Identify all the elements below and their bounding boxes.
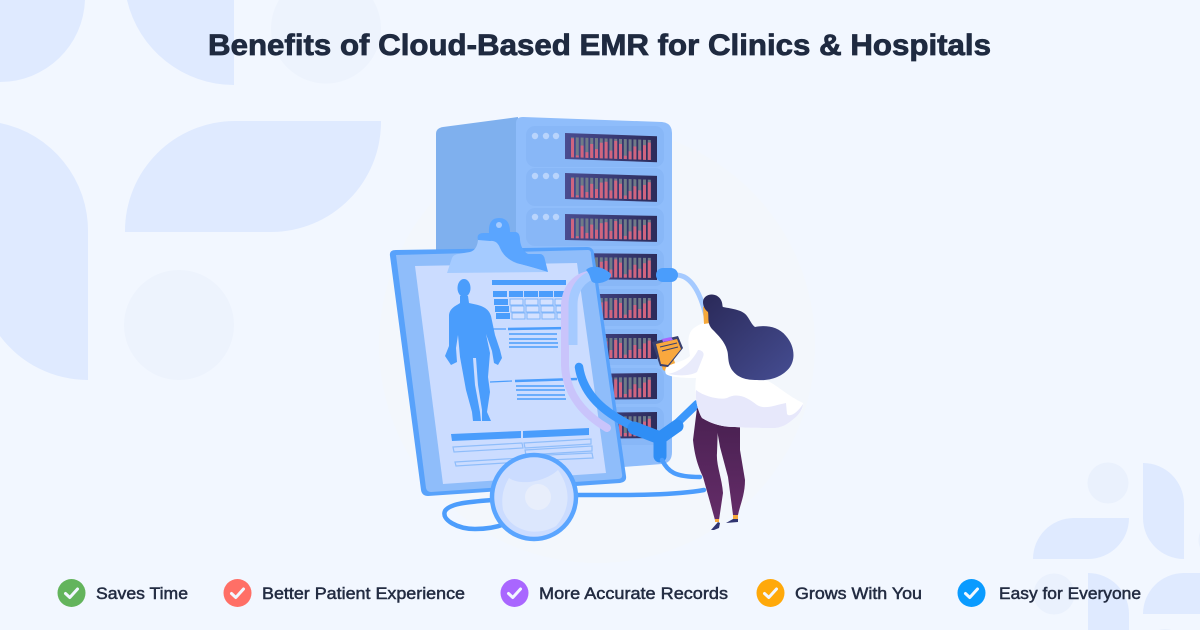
- check icon: [58, 579, 86, 607]
- server tower: [436, 117, 672, 472]
- benefit: better patient experience: [224, 579, 465, 607]
- stethoscope: thick dark tubes and junction: [579, 367, 700, 477]
- stethoscope: left ear tip: [586, 267, 611, 283]
- check icon: [958, 579, 986, 607]
- benefit: more accurate records: [500, 579, 728, 607]
- server bar displays: [565, 133, 657, 439]
- pale backdrop circle: [379, 127, 815, 563]
- stethoscope: right ear tip: [656, 268, 678, 282]
- patient data table: [492, 280, 570, 319]
- label: Easy for Everyone: [999, 584, 1141, 603]
- server slots: [526, 126, 664, 445]
- hand: [660, 354, 676, 372]
- ankles: [715, 515, 738, 522]
- shoes: [711, 519, 738, 530]
- check icon: [756, 579, 784, 607]
- benefit: easy for everyone: [958, 579, 1141, 607]
- check icon: [224, 579, 252, 607]
- clipboard: [390, 218, 626, 496]
- coat: [665, 322, 803, 428]
- woman doctor: [652, 294, 803, 530]
- annotation lines: upper: [493, 328, 570, 347]
- label: More Accurate Records: [539, 584, 728, 603]
- lower form table: [451, 428, 593, 466]
- clipboard clip: [447, 218, 548, 273]
- check icon: [500, 579, 528, 607]
- annotation lines: lower: [490, 379, 577, 399]
- clipboard paper sheet: [415, 263, 606, 484]
- server indicator lights: [532, 133, 559, 220]
- coat lower shading: [696, 390, 803, 428]
- human body silhouette: [445, 279, 502, 421]
- stethoscope: right tube to ear tip: [676, 275, 708, 325]
- benefit: saves time: [58, 579, 188, 607]
- stethoscope chest piece: [492, 455, 576, 539]
- title: Benefits of Cloud-Based EMR for Clinics & Hospitals: [208, 29, 991, 62]
- illustration: [390, 117, 803, 539]
- label: Saves Time: [96, 584, 188, 603]
- background shapes: top left: [0, 0, 381, 380]
- background shapes: bottom right: [1033, 462, 1200, 630]
- benefit: grows with you: [756, 579, 922, 607]
- legs: [693, 408, 745, 520]
- hair: [703, 294, 793, 380]
- lower stethoscope tube and loop: [444, 490, 704, 529]
- face: [703, 304, 710, 324]
- stethoscope: lavender tube behind the sheet: [565, 275, 607, 428]
- notebook: [652, 336, 683, 367]
- label: Grows With You: [795, 584, 922, 603]
- sleeve shading: [668, 350, 704, 375]
- label: Better Patient Experience: [262, 584, 465, 603]
- stethoscope: upper light tube: [573, 274, 600, 345]
